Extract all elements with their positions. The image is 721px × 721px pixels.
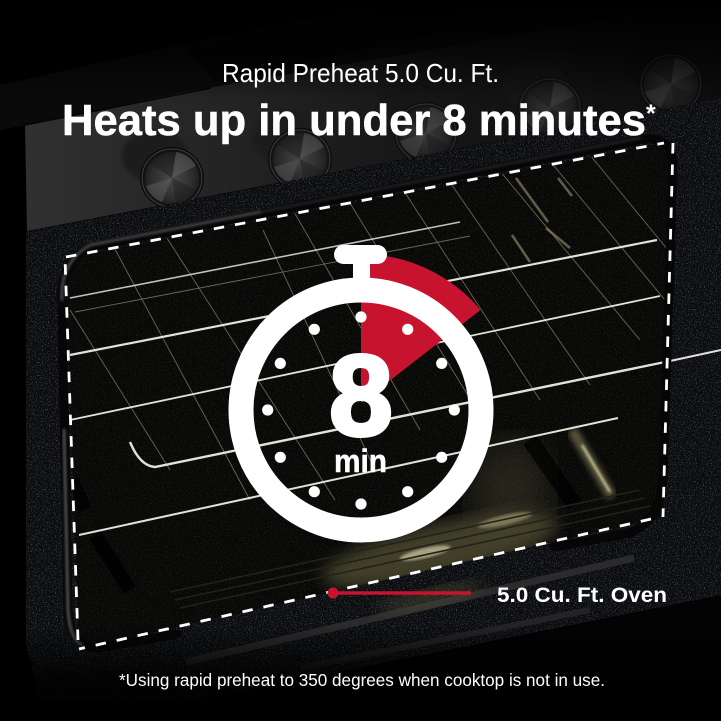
callout: 5.0 Cu. Ft. Oven <box>328 584 667 607</box>
background: lower drawer and trim <box>186 558 721 721</box>
heading: subtitle: Rapid Preheat 5.0 Cu. Ft. <box>222 58 499 88</box>
icon: control knobs <box>122 36 703 209</box>
number 8: 8 <box>329 333 393 460</box>
callout: 5.0 Cu. Ft. Oven: 5.0 Cu. Ft. Oven <box>497 584 667 607</box>
stopwatch infographic <box>241 245 481 530</box>
heading: title: * <box>646 100 656 128</box>
background: oven cavity <box>65 144 668 644</box>
stopwatch ring <box>241 290 481 530</box>
stopwatch crown <box>334 245 387 284</box>
heading: title: Heats up in under 8 minutes <box>62 96 646 145</box>
wire extending past the frame <box>670 350 721 361</box>
background: range control panel <box>0 0 721 231</box>
footnote: *Using rapid preheat to 350 degrees when cooktop is not in use. <box>119 670 605 690</box>
background: door gasket <box>62 138 673 648</box>
background: oven racks <box>70 155 670 535</box>
minute dots <box>262 311 460 510</box>
red elapsed wedge <box>361 254 480 403</box>
min label: min <box>334 443 387 479</box>
dashed oven capacity outline <box>65 143 673 649</box>
